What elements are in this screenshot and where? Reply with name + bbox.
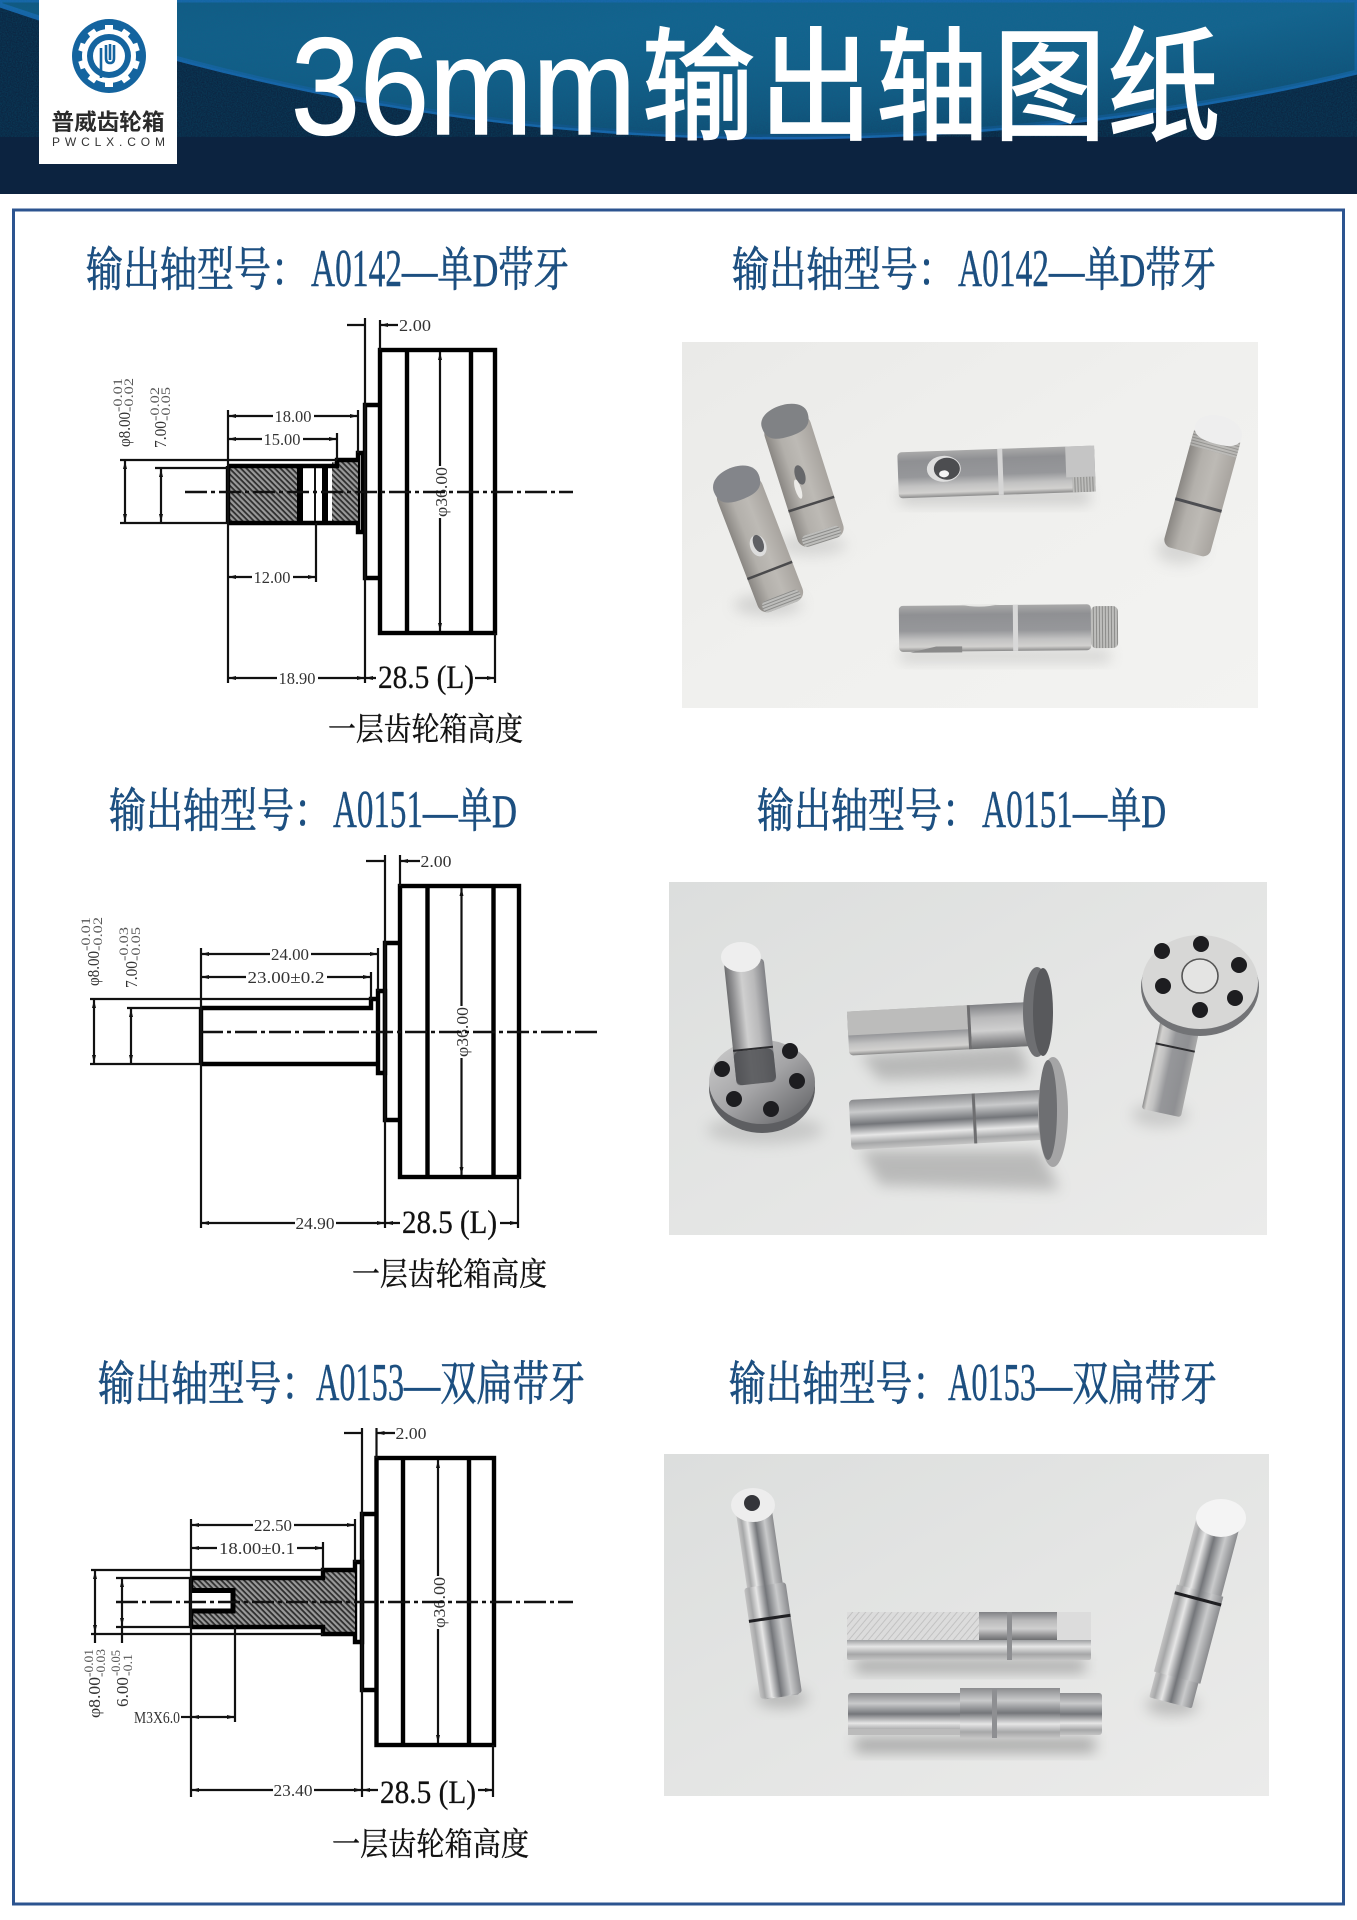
dimensions: 12.00 xyxy=(254,568,290,587)
dimensions xyxy=(81,1424,493,1811)
row 3 heading right xyxy=(729,1354,1217,1412)
row 3 heading left: —双扁带牙 xyxy=(403,1359,585,1411)
dimensions xyxy=(110,316,495,696)
dimensions: -0.01 xyxy=(110,378,125,412)
header banner xyxy=(0,0,1357,194)
photo: A0151 flanged shafts xyxy=(669,882,1267,1235)
dimensions: 18.00 xyxy=(274,407,312,426)
dimensions: M3X6.0 xyxy=(134,1708,180,1727)
dimensions: φ8.00 xyxy=(115,412,134,447)
dimensions: 18.90 xyxy=(278,669,316,688)
row 2 heading left: —单D xyxy=(422,786,517,838)
dimensions: -0.02 xyxy=(90,917,105,951)
caption: 一层齿轮箱高度 xyxy=(352,1256,547,1292)
row 1 heading left: 输出轴型号： xyxy=(86,245,308,297)
shaft right xyxy=(1156,410,1246,564)
row 1 heading right: A0142 xyxy=(958,240,1049,298)
caption: 一层齿轮箱高度 xyxy=(328,711,523,747)
logo brand name: 普威齿轮箱 xyxy=(52,110,164,135)
dimensions: 23.40 xyxy=(274,1781,312,1800)
drawing: A0142 xyxy=(110,316,573,747)
row 1 heading right xyxy=(732,240,1216,298)
dimensions: 24.00 xyxy=(271,945,309,964)
flanged shaft standing right xyxy=(1132,935,1259,1127)
row 2 heading left xyxy=(109,781,517,839)
dimensions: 28.5 (L) xyxy=(378,660,474,696)
dimensions: 18.00±0.1 xyxy=(219,1539,295,1558)
row 3 heading right: —双扁带牙 xyxy=(1035,1359,1217,1411)
photo: A0142 shafts xyxy=(682,342,1258,708)
hatched shaft section xyxy=(228,460,358,523)
title: 36mm xyxy=(291,10,636,164)
caption: 一层齿轮箱高度 xyxy=(332,1826,529,1862)
title: 输出轴图纸 xyxy=(642,20,1220,156)
row 3 heading left xyxy=(98,1354,585,1412)
banner curved blue arc xyxy=(0,0,1357,137)
row 2 heading right: A0151 xyxy=(982,781,1073,839)
shaft left xyxy=(731,1488,808,1708)
row 3 heading left: 输出轴型号： xyxy=(98,1359,318,1411)
dimensions xyxy=(78,852,518,1241)
dimensions: -0.02 xyxy=(121,378,136,412)
icon: gear logo mark xyxy=(72,19,146,93)
centerline xyxy=(201,1031,599,1033)
row 3 heading left: A0153 xyxy=(316,1354,404,1412)
dimensions: φ36.00 xyxy=(430,1577,449,1628)
shaft center top xyxy=(897,446,1096,504)
dimensions: -0.1 xyxy=(120,1654,135,1676)
logo url: PWCLX.COM xyxy=(52,135,165,149)
shaft outline xyxy=(201,999,378,1064)
dimensions: 2.00 xyxy=(396,1424,426,1443)
shaft back left xyxy=(757,398,846,555)
dimensions: -0.03 xyxy=(93,1649,108,1677)
row 1 heading right: 输出轴型号： xyxy=(732,245,955,297)
dimensions: φ36.00 xyxy=(432,467,451,517)
dimensions: 7.00 xyxy=(151,421,170,448)
logo xyxy=(39,0,177,164)
dimensions: 6.00 xyxy=(113,1677,132,1707)
dimensions: 28.5 (L) xyxy=(402,1205,497,1241)
dimensions: 23.00±0.2 xyxy=(248,968,324,987)
shaft right xyxy=(1146,1499,1246,1715)
row 1 heading left: A0142 xyxy=(311,240,402,298)
dimensions: φ8.00 xyxy=(85,1677,104,1718)
gearbox body xyxy=(355,1458,494,1745)
dimensions: 28.5 (L) xyxy=(380,1775,476,1811)
dimensions: -0.03 xyxy=(116,927,131,961)
shaft center top xyxy=(847,1612,1091,1672)
row 2 heading left: 输出轴型号： xyxy=(109,786,331,838)
flanged shaft lower middle xyxy=(849,1057,1068,1190)
centerline xyxy=(185,491,573,493)
shaft front left xyxy=(708,459,806,615)
dimensions: -0.01 xyxy=(78,917,93,951)
dimensions: -0.01 xyxy=(81,1649,96,1677)
flanged shaft standing left xyxy=(707,942,823,1144)
dimensions: 2.00 xyxy=(399,316,431,335)
dimensions: φ36.00 xyxy=(453,1007,472,1057)
dimensions: 24.90 xyxy=(296,1214,334,1233)
shaft center bottom xyxy=(848,1688,1102,1752)
dimensions: 2.00 xyxy=(420,852,452,871)
dimensions: -0.05 xyxy=(108,1650,123,1676)
row 1 heading left xyxy=(86,240,569,298)
dimensions: 7.00 xyxy=(122,961,141,988)
dimensions: φ8.00 xyxy=(84,951,103,986)
row 1 heading left: —单D带牙 xyxy=(401,245,569,297)
row 2 heading right xyxy=(757,781,1166,839)
row 3 heading right: A0153 xyxy=(948,1354,1036,1412)
row 2 heading right: 输出轴型号： xyxy=(757,786,979,838)
dimensions: -0.05 xyxy=(158,387,173,421)
row 2 heading right: —单D xyxy=(1072,786,1166,838)
dimensions: 15.00 xyxy=(264,430,300,449)
row 2 heading left: A0151 xyxy=(333,781,423,839)
drawing: A0153 xyxy=(81,1424,573,1862)
hatched shaft section xyxy=(191,1570,355,1634)
dimensions: 22.50 xyxy=(254,1516,292,1535)
drawing: A0151 xyxy=(78,852,599,1292)
row 1 heading right: —单D带牙 xyxy=(1048,245,1216,297)
gearbox body xyxy=(358,350,495,633)
photo: A0153 shafts xyxy=(664,1454,1269,1796)
shaft center bottom xyxy=(899,603,1118,662)
title xyxy=(291,10,1220,164)
gearbox body xyxy=(378,886,519,1177)
centerline xyxy=(116,1601,573,1603)
row 3 heading right: 输出轴型号： xyxy=(729,1359,949,1411)
dimensions: -0.02 xyxy=(147,387,162,421)
flanged shaft upper middle xyxy=(847,967,1053,1080)
dimensions: -0.05 xyxy=(128,927,143,961)
